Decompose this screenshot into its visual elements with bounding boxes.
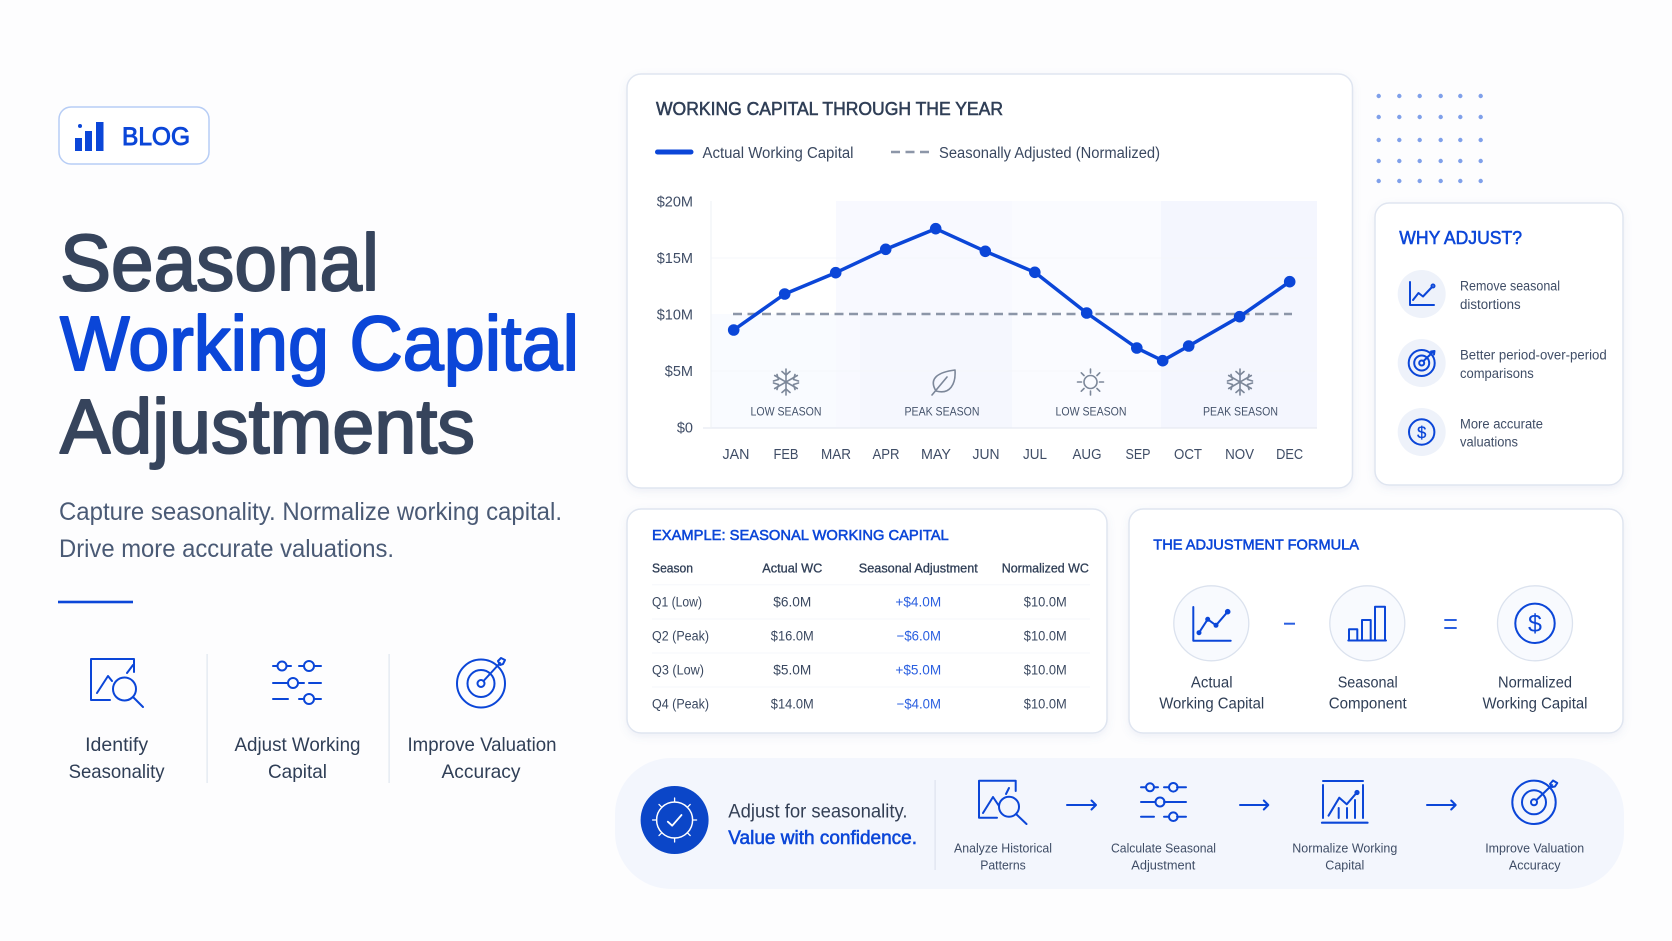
panel: bottom process band: [615, 758, 1624, 889]
why adjust heading: WHY ADJUST?: [1399, 228, 1522, 248]
x axis labels: DEC: [1276, 447, 1303, 463]
reason: accurate valuations: [1398, 408, 1543, 456]
x axis labels: MAY: [921, 447, 951, 463]
panel: why adjust: [1375, 203, 1623, 485]
panel: adjustment formula: [1129, 509, 1623, 733]
y axis labels: [657, 194, 693, 436]
normalized wc values: $10.0M: [1024, 662, 1067, 678]
step: normalize working capital: Normalize Working: [1292, 840, 1397, 855]
table row labels: Q2 (Peak): [652, 628, 709, 644]
seasonal adjustment values: −$6.0M: [897, 628, 941, 644]
term: seasonal component: Seasonal: [1338, 675, 1398, 692]
step: improve valuation accuracy: Accuracy: [1509, 857, 1561, 872]
icon: snowflake low season: [774, 369, 798, 395]
formula heading: THE ADJUSTMENT FORMULA: [1153, 536, 1359, 553]
term: normalized working capital: [1482, 586, 1588, 713]
x axis labels: JAN: [722, 447, 750, 463]
table header: [652, 561, 1089, 576]
table header: Season: [652, 561, 693, 576]
feature: improve valuation accuracy: [408, 658, 556, 783]
feature: identify seasonality: Identify: [85, 734, 148, 756]
table header: Actual WC: [762, 561, 822, 576]
decorative dot grid: [1376, 94, 1483, 183]
feature: improve valuation accuracy: Improve Valuation: [408, 734, 556, 756]
season labels: PEAK SEASON: [1203, 404, 1278, 418]
term: normalized working capital: $: [1528, 610, 1542, 638]
step: calculate seasonal adjustment: Adjustment: [1131, 857, 1196, 872]
x axis labels: AUG: [1072, 447, 1102, 463]
badge: blog: [59, 107, 209, 164]
x axis labels: APR: [872, 447, 900, 463]
icon: chart with magnifier: [91, 659, 143, 707]
normalized wc values: $10.0M: [1024, 628, 1067, 644]
table row labels: [652, 594, 709, 712]
title: Working Capital: [60, 301, 579, 387]
table row labels: Q3 (Low): [652, 662, 704, 678]
reason: accurate valuations: More accurate: [1460, 417, 1543, 432]
icon: bar chart: [75, 122, 104, 151]
arrow: [1427, 800, 1456, 810]
actual working capital line: [728, 223, 1295, 367]
seasonal adjustment values: [895, 594, 941, 712]
table heading: EXAMPLE: SEASONAL WORKING CAPITAL: [652, 527, 949, 544]
arrow: [1067, 800, 1096, 810]
reason: remove seasonal distortions: [1398, 270, 1560, 318]
x axis labels: OCT: [1174, 447, 1202, 463]
feature: improve valuation accuracy: Accuracy: [442, 761, 521, 783]
normalized wc values: [1024, 594, 1067, 712]
seasonal adjustment values: −$4.0M: [897, 696, 941, 712]
term: seasonal component: Component: [1329, 696, 1407, 713]
normalized wc values: $10.0M: [1024, 594, 1067, 610]
reason: accurate valuations: $: [1417, 424, 1426, 442]
x axis labels: JUL: [1023, 447, 1047, 463]
panel: example table: [627, 509, 1107, 733]
step: analyze historical patterns: [954, 781, 1052, 872]
table row labels: Q4 (Peak): [652, 696, 709, 712]
x axis labels: MAR: [821, 447, 851, 463]
feature: adjust working capital: Adjust Working: [234, 734, 360, 756]
reason: period comparisons: Better period-over-period: [1460, 348, 1607, 363]
icon: leaf peak season: [932, 370, 955, 395]
step: analyze historical patterns: Analyze Historical: [954, 840, 1052, 855]
icon: sun low season: [1078, 369, 1104, 395]
icon: confidence badge: [641, 786, 709, 854]
legend: Seasonally Adjusted (Normalized): [939, 145, 1160, 162]
actual wc values: $5.0M: [773, 662, 811, 678]
x axis labels: JUN: [972, 447, 1000, 463]
y axis labels: $5M: [665, 364, 693, 380]
operator: equals: [1444, 620, 1457, 628]
legend: [658, 145, 1160, 162]
subtitle: Capture seasonality. Normalize working capital.: [59, 498, 562, 526]
y axis labels: $10M: [657, 308, 693, 324]
x axis labels: SEP: [1126, 447, 1150, 463]
term: actual working capital: Actual: [1191, 675, 1233, 692]
icon: sliders: [273, 661, 321, 704]
tagline: Value with confidence.: [728, 828, 917, 849]
table row labels: Q1 (Low): [652, 594, 702, 610]
reason: period comparisons: [1398, 339, 1607, 387]
actual wc values: [771, 594, 814, 712]
table header: Seasonal Adjustment: [859, 561, 978, 576]
y axis labels: $20M: [657, 194, 693, 210]
reason: remove seasonal distortions: distortions: [1460, 297, 1521, 312]
term: normalized working capital: Working Capital: [1482, 696, 1588, 713]
season labels: [750, 404, 1278, 418]
season bands: [711, 201, 1317, 428]
reason: remove seasonal distortions: Remove seasonal: [1460, 279, 1560, 294]
tagline: [728, 802, 917, 849]
reason: period comparisons: comparisons: [1460, 366, 1534, 381]
x axis labels: [722, 447, 1303, 463]
term: normalized working capital: Normalized: [1498, 675, 1572, 692]
step: normalize working capital: [1292, 781, 1397, 872]
step: improve valuation accuracy: Improve Valuation: [1485, 840, 1584, 855]
y axis labels: $15M: [657, 251, 693, 267]
operator: minus: [1284, 623, 1295, 625]
title: Seasonal: [60, 218, 379, 307]
step: improve valuation accuracy: [1485, 780, 1584, 872]
seasonal adjustment values: +$4.0M: [895, 594, 941, 610]
step: calculate seasonal adjustment: [1111, 783, 1216, 872]
step: calculate seasonal adjustment: Calculate Seasonal: [1111, 840, 1216, 855]
chart heading: WORKING CAPITAL THROUGH THE YEAR: [656, 98, 1003, 119]
step: normalize working capital: Capital: [1325, 857, 1364, 872]
reason: accurate valuations: valuations: [1460, 435, 1518, 450]
accent rule: [58, 601, 133, 603]
feature: identify seasonality: Seasonality: [69, 761, 165, 783]
actual wc values: $16.0M: [771, 628, 814, 644]
normalized dashed line: [733, 313, 1292, 315]
term: actual working capital: Working Capital: [1159, 696, 1264, 713]
season labels: LOW SEASON: [1056, 404, 1126, 418]
normalized wc values: $10.0M: [1024, 696, 1067, 712]
badge: blog: BLOG: [122, 123, 190, 151]
step: analyze historical patterns: Patterns: [980, 857, 1026, 872]
y axis labels: $0: [677, 420, 693, 436]
icon: snowflake peak season: [1228, 369, 1252, 395]
subtitle: Drive more accurate valuations.: [59, 535, 394, 563]
feature: identify seasonality: [69, 659, 165, 783]
x axis labels: FEB: [774, 447, 798, 463]
arrow: [1240, 800, 1268, 810]
tagline: Adjust for seasonality.: [728, 802, 908, 823]
actual wc values: $6.0M: [773, 594, 811, 610]
panel: working capital chart: [627, 74, 1352, 488]
seasonal adjustment values: +$5.0M: [895, 662, 941, 678]
feature: adjust working capital: [234, 661, 360, 783]
season labels: LOW SEASON: [750, 404, 822, 418]
season labels: PEAK SEASON: [904, 404, 980, 418]
title: [60, 218, 579, 470]
table header: Normalized WC: [1002, 561, 1089, 576]
feature: adjust working capital: Capital: [268, 761, 327, 783]
legend: Actual Working Capital: [702, 145, 854, 162]
subtitle: [59, 498, 562, 563]
term: actual working capital: [1159, 586, 1264, 713]
actual wc values: $14.0M: [771, 696, 814, 712]
title: Adjustments: [60, 384, 475, 470]
term: seasonal component: [1329, 586, 1407, 713]
x axis labels: NOV: [1225, 447, 1254, 463]
icon: target: [457, 658, 505, 708]
